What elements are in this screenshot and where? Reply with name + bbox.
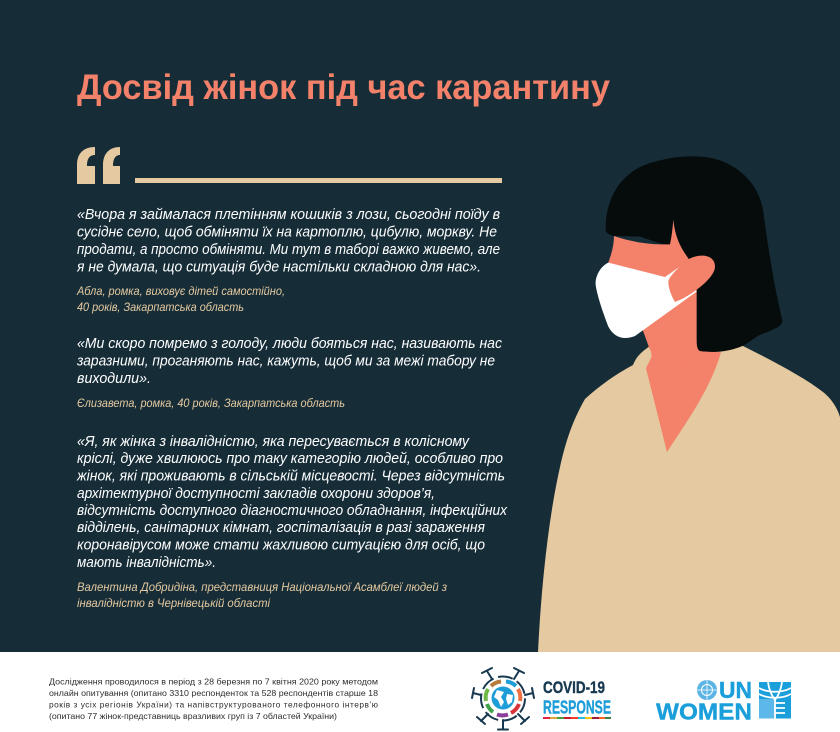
quote 3: «Я, як жінка з інвалідністю, яка пересувається в колісному xyxy=(77,433,470,450)
mask xyxy=(596,261,697,338)
quote 3: архітектурної доступності закладів охорони здоров’я, xyxy=(77,485,435,502)
logo: UN Women: WOMEN xyxy=(656,698,752,724)
icon: quotation mark with rule xyxy=(77,147,502,184)
footer methodology note xyxy=(49,676,378,721)
quote 3: відділень, санітарних кімнат, госпіталізація в разі зараження xyxy=(77,519,485,536)
quote 1 xyxy=(76,206,500,276)
attribution 3: Валентина Добридіна, представниця Національної Асамблеї людей з xyxy=(77,581,448,594)
attribution 2: Єлизавета, ромка, 40 років, Закарпатська область xyxy=(77,397,345,410)
quote 1: сусіднє село, щоб обміняти їх на картоплю, цибулю, моркву. Не xyxy=(77,224,497,240)
quote 3: жінок, які проживають в сільській місцевості. Через відсутність xyxy=(76,468,505,484)
footer methodology note: (опитано 77 жінок-представниць вразливих груп із 7 областей України) xyxy=(49,711,337,721)
quote 2 xyxy=(76,335,502,387)
quote 1: продати, а просто обміняти. Ми тут в таборі важко живемо, але xyxy=(77,241,500,258)
quote 3: відсутність доступного діагностичного обладнання, інфекційних xyxy=(77,502,507,519)
logo: COVID-19 Response xyxy=(472,668,611,730)
quote 2: заразними, проганяють нас, кажуть, щоб ми за межі табору не xyxy=(76,352,495,370)
logo wordmark: COVID-19 xyxy=(543,678,605,697)
footer methodology note: Дослідження проводилося в період з 28 березня по 7 квітня 2020 року методом xyxy=(49,676,378,686)
logo wordmark: UN xyxy=(719,677,752,703)
icon: UN emblem xyxy=(697,680,717,700)
hair xyxy=(606,156,782,352)
attribution 1 xyxy=(76,285,285,314)
icon: UN Women globe symbol xyxy=(759,682,791,718)
quote 3: мають інвалідність». xyxy=(77,554,216,571)
icon: virus ring with globe xyxy=(472,668,534,730)
logo: UN Women xyxy=(656,677,791,724)
quote 1: «Вчора я займалася плетінням кошиків з лози, сьогодні поїду в xyxy=(77,206,500,223)
attribution 1: 40 років, Закарпатська область xyxy=(77,301,244,314)
attribution 3: інвалідністю в Чернівецькій області xyxy=(77,597,270,610)
neck xyxy=(646,332,721,452)
quote 2: «Ми скоро помремо з голоду, люди бояться нас, називають нас xyxy=(77,335,502,352)
quote 3: коронавірусом може стати жахливою ситуацією для осіб, що xyxy=(77,537,485,554)
quote 3 xyxy=(76,433,507,571)
quote 2: виходили». xyxy=(77,370,151,387)
logo: COVID-19 Response: RESPONSE xyxy=(543,698,611,718)
ear xyxy=(668,256,715,302)
title: Досвід жінок під час карантину xyxy=(77,68,611,107)
sweater xyxy=(538,346,840,652)
footer methodology note: онлайн опитування (опитано 3310 респонденток та 528 респондентів старше 18 xyxy=(49,688,378,698)
attribution 3 xyxy=(77,581,448,610)
attribution 1: Абла, ромка, виховує дітей самостійно, xyxy=(76,285,285,298)
illustration: woman wearing a mask xyxy=(538,156,840,652)
SDG color strip xyxy=(543,717,611,719)
face xyxy=(608,219,721,363)
quote 1: я не думала, що ситуація буде настільки складною для нас». xyxy=(76,258,481,276)
footer methodology note: років з усіх регіонів України) та напівструктурованого телефонного інтерв’ю xyxy=(49,700,378,710)
footer panel xyxy=(0,652,840,732)
quote 3: кріслі, дуже хвилююсь про таку категорію людей, особливо про xyxy=(77,450,503,467)
